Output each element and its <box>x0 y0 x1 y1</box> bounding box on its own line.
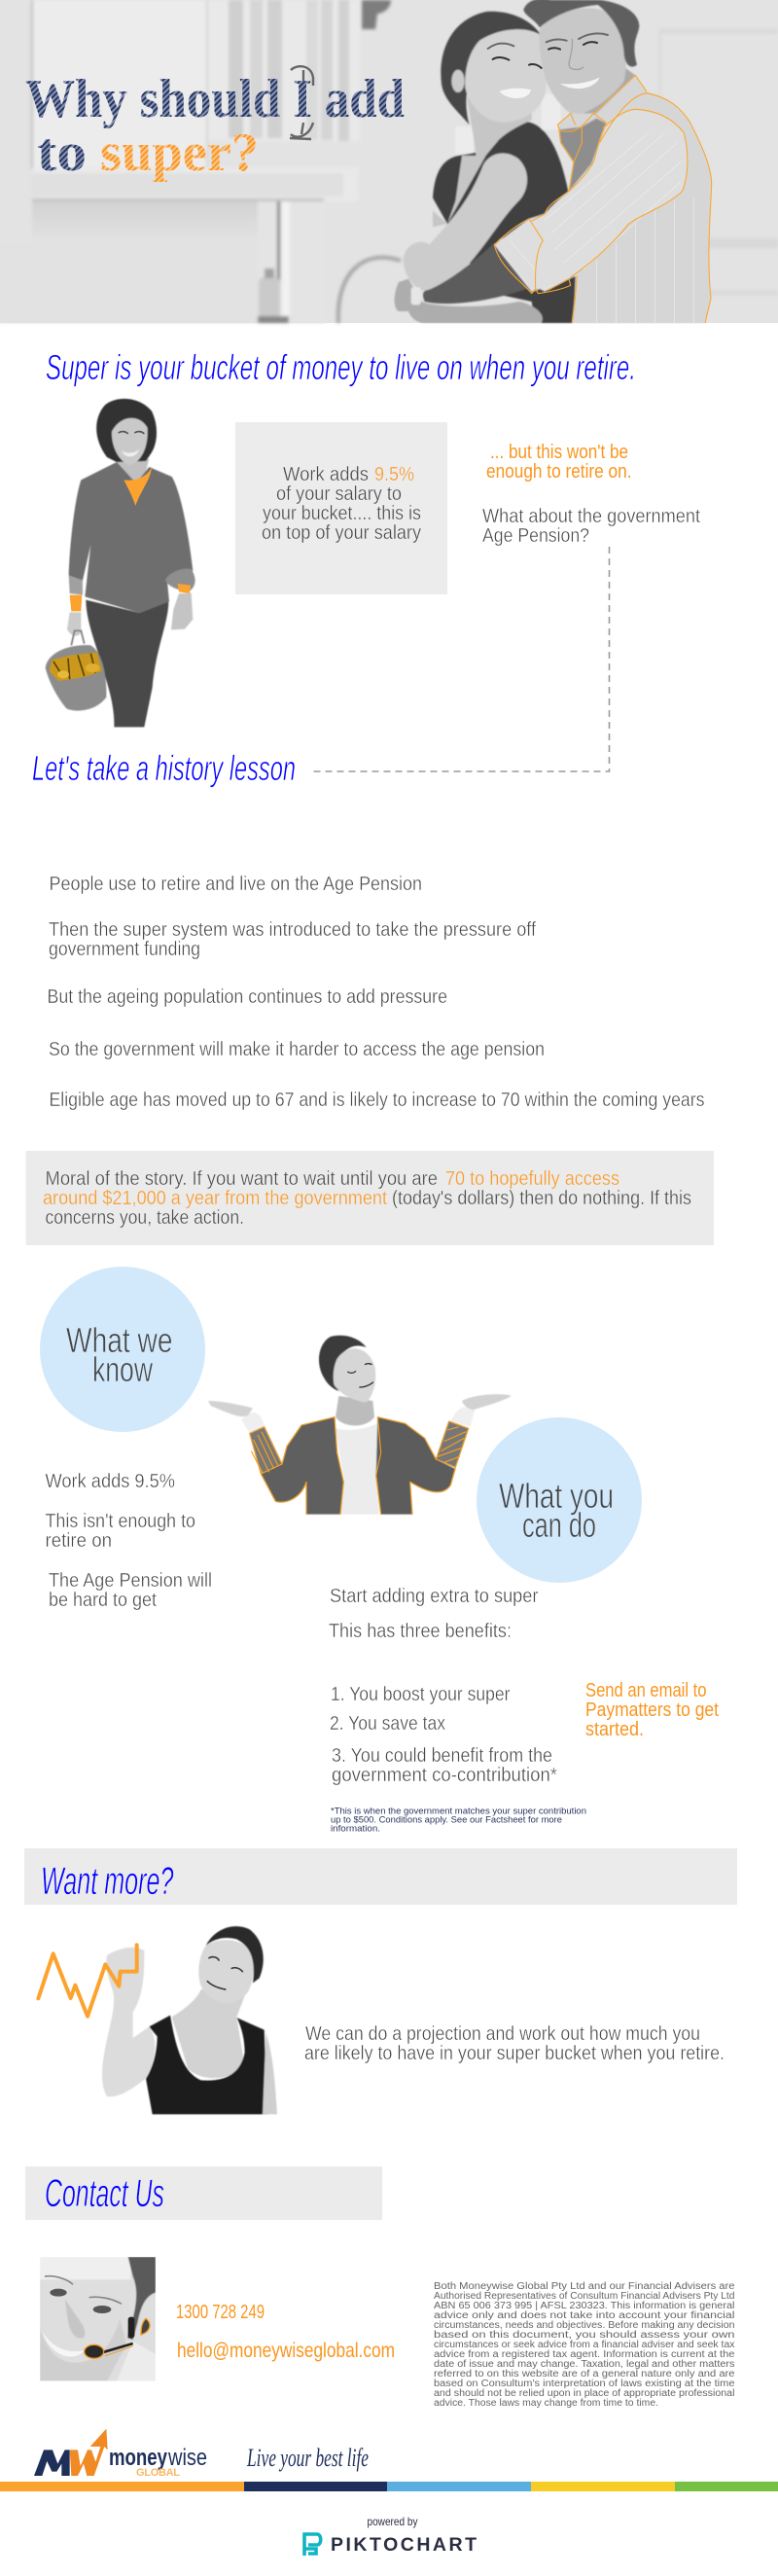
moral text <box>43 1168 691 1229</box>
photo: woman with headset <box>40 2257 156 2381</box>
powered by label: powered by <box>368 2515 418 2528</box>
action list: 3. You could benefit from the <box>332 1745 552 1767</box>
illustration: woman with bucket <box>46 399 195 727</box>
piktochart wordmark: PIKTOCHART <box>331 2534 477 2556</box>
couple photo <box>395 0 712 324</box>
panel: what we know <box>40 1267 212 1611</box>
contact details: 1300 728 249 <box>176 2302 265 2323</box>
contact details: hello@moneywiseglobal.com <box>177 2340 395 2362</box>
moral text: concerns you, take action. <box>45 1207 244 1229</box>
title line two: to <box>37 123 87 183</box>
action list: 2. You save tax <box>330 1713 445 1735</box>
box text: on top of your salary <box>262 522 421 544</box>
orange tee and wristbands <box>70 467 191 611</box>
illustration: woman drawing chart <box>38 1926 277 2114</box>
hero panel <box>0 0 778 324</box>
text: age pension question: Age Pension? <box>482 525 589 547</box>
footnote: *This is when the government matches your super contribution <box>331 1806 586 1817</box>
circle heading <box>477 1417 642 1583</box>
tagline: Live your best life <box>246 2444 369 2472</box>
panel: want more heading <box>24 1848 737 1905</box>
circle text: What you <box>499 1476 614 1516</box>
text: projection: We can do a projection and work out how much you <box>305 2023 700 2045</box>
box text: of your salary to <box>276 483 402 505</box>
contact details <box>176 2302 395 2362</box>
disclaimer: advice. Those laws may change from time to time. <box>434 2398 658 2409</box>
text block: history: People use to retire and live on the Age Pension <box>49 874 422 895</box>
footnote: information. <box>331 1823 380 1835</box>
callout: not enough: enough to retire on. <box>486 461 632 483</box>
logo wordmark second part: wise <box>167 2445 207 2471</box>
disclaimer: and should not be relied upon in place of appropriate professional <box>434 2388 735 2399</box>
moral text: (today's dollars) then do nothing. If this <box>392 1188 691 1209</box>
panel: moral of the story <box>25 1151 714 1245</box>
title line one: Why should I add <box>25 69 405 129</box>
callout: not enough: ... but this won't be <box>490 442 628 463</box>
disclaimer <box>434 2281 735 2409</box>
box text: Work adds <box>283 464 369 485</box>
action list: Start adding extra to super <box>330 1586 539 1607</box>
panel: contact heading: Contact Us <box>45 2172 164 2215</box>
panel: contact heading <box>25 2166 382 2220</box>
circle text: know <box>92 1349 154 1389</box>
grey box <box>235 422 447 594</box>
know list <box>45 1471 212 1611</box>
title orange word: super? <box>100 123 259 183</box>
orange chart line <box>38 1945 137 2017</box>
action list: government co-contribution* <box>332 1765 557 1786</box>
call to action: Send an email to <box>585 1680 706 1701</box>
headset microphone <box>85 2317 150 2358</box>
eyes and brows <box>45 2276 122 2313</box>
action list: This has three benefits: <box>329 1621 512 1642</box>
orange outline and sleeve hatching <box>250 1417 469 1515</box>
circle heading <box>40 1267 205 1432</box>
panel: work adds 9.5% <box>235 422 447 594</box>
logo: moneywise global <box>34 2429 207 2479</box>
footnote: up to $500. Conditions apply. See our Factsheet for more <box>331 1815 562 1825</box>
circle text: can do <box>522 1505 596 1545</box>
disclaimer: advice from a registered tax agent. Information is current at the <box>434 2349 735 2360</box>
know list: Work adds 9.5% <box>45 1471 175 1492</box>
disclaimer: advice only and does not take into account your financial <box>434 2310 735 2321</box>
disclaimer: based on this document, you should assess your own <box>434 2330 735 2341</box>
faces detail <box>488 33 608 68</box>
illustration: woman shrugging <box>208 1336 512 1515</box>
logo mark <box>34 2429 108 2476</box>
text block: history <box>47 874 704 1111</box>
action list: 1. You boost your super <box>331 1684 511 1705</box>
circle text <box>499 1476 614 1545</box>
hero title <box>25 66 405 183</box>
disclaimer: Both Moneywise Global Pty Ltd and our Financial Advisers are <box>434 2281 735 2292</box>
moral text: Moral of the story. If you want to wait until you are <box>45 1168 438 1190</box>
know list: be hard to get <box>49 1590 157 1611</box>
disclaimer: referred to on this website are of a general nature only and are <box>434 2369 735 2379</box>
powered by piktochart <box>304 2515 477 2556</box>
text: projection: are likely to have in your super bucket when you retire. <box>304 2043 725 2064</box>
face detail <box>119 432 144 434</box>
disclaimer: based on Consultum's interpretation of laws existing at the time <box>434 2379 735 2389</box>
box text: your bucket.... this is <box>263 503 421 524</box>
face detail <box>207 1957 242 1989</box>
shirt pinstripes <box>499 133 693 324</box>
box text: 9.5% <box>374 464 414 485</box>
disclaimer: circumstances, needs and objectives. Before making any decision <box>434 2320 735 2331</box>
orange shirt outline <box>494 75 712 323</box>
circle text: What we <box>66 1320 173 1360</box>
box text <box>262 464 421 544</box>
moral background <box>25 1151 714 1245</box>
disclaimer: Authorised Representatives of Consultum Financial Advisers Pty Ltd <box>434 2291 735 2302</box>
logo sub-brand: GLOBAL <box>136 2467 180 2479</box>
know list: retire on <box>45 1530 112 1552</box>
callout: not enough <box>486 442 632 483</box>
text block: history: But the ageing population continues to add pressure <box>47 986 447 1008</box>
call to action <box>585 1680 719 1740</box>
smiles <box>499 39 600 98</box>
text: projection <box>304 2023 725 2064</box>
call to action: started. <box>585 1719 644 1740</box>
text block: history: government funding <box>49 939 200 960</box>
arrow: dashed connector <box>311 547 609 771</box>
disclaimer: circumstances or seek advice from a financial adviser and seek tax <box>434 2340 735 2350</box>
know list: The Age Pension will <box>49 1570 212 1592</box>
call to action: Paymatters to get <box>585 1699 719 1721</box>
action list <box>329 1586 557 1786</box>
smile <box>42 2332 85 2356</box>
disclaimer: date of issue and may change. Taxation, legal and other matters <box>434 2359 735 2370</box>
text: age pension question: What about the government <box>482 506 700 527</box>
gold coins <box>50 653 102 681</box>
disclaimer: ABN 65 006 373 995 | AFSL 230323. This information is general <box>434 2301 735 2311</box>
title ornament on letter I <box>290 66 313 139</box>
panel: want more heading: Want more? <box>41 1860 174 1903</box>
text block: history: So the government will make it harder to access the age pension <box>49 1039 545 1060</box>
know list: This isn't enough to <box>45 1511 195 1532</box>
piktochart icon <box>304 2534 321 2556</box>
moral text: 70 to hopefully access <box>445 1168 619 1190</box>
circle text <box>66 1320 173 1389</box>
hero kitchen background <box>0 0 778 323</box>
footnote <box>331 1806 586 1835</box>
logo wordmark: money <box>109 2445 168 2471</box>
heading: history lesson: Let's take a history lesson <box>32 748 296 788</box>
face detail <box>347 1364 373 1387</box>
moral text: around $21,000 a year from the government <box>43 1188 387 1209</box>
colour bar <box>0 2482 778 2491</box>
text block: history: Then the super system was introduced to take the pressure off <box>49 919 536 941</box>
text: age pension question <box>482 506 700 547</box>
text block: history: Eligible age has moved up to 67 and is likely to increase to 70 within the coming years <box>49 1090 704 1111</box>
panel: what you can do <box>329 1417 719 1835</box>
